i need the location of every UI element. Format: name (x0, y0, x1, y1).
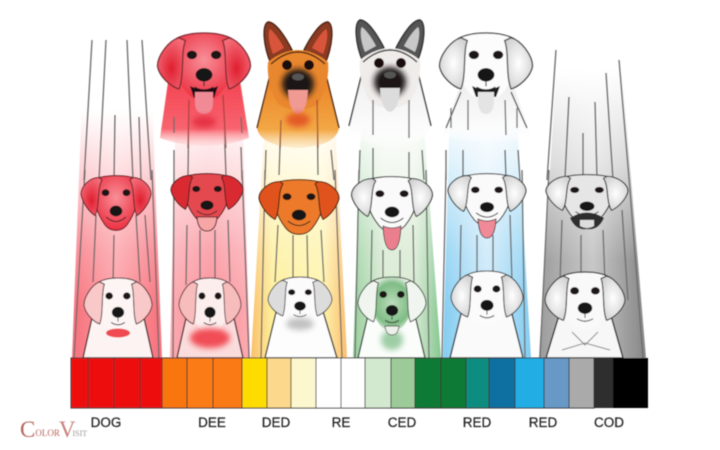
dog: orange shepherd, top row (257, 22, 339, 148)
spectrum labels: DOG (91, 415, 121, 430)
logo: ColorVisit: OLOR (35, 428, 60, 438)
dog: white golden, top row (440, 33, 532, 142)
bottom row dog: shaggy white on grey (545, 272, 625, 358)
coloured background bands (72, 70, 646, 358)
spectrum labels: COD (594, 415, 624, 430)
bottom row dog: white (265, 277, 337, 358)
logo: ColorVisit: V (59, 417, 76, 442)
spectrum labels: DEE (198, 415, 226, 430)
middle row dog: orange (259, 180, 339, 234)
spectrum labels: DED (262, 415, 290, 430)
middle row dog: white with small tongue (448, 174, 526, 238)
dog: grey shepherd, top row (349, 20, 431, 146)
bottom row dog: white with wide red chest (177, 278, 243, 358)
vertical lines behind the dogs (74, 40, 643, 358)
bottom row dog: white with green face (358, 277, 426, 358)
dog: red golden, top row (158, 33, 250, 146)
logo: ColorVisit: C (20, 417, 35, 442)
middle row dog: red (81, 176, 151, 230)
spectrum labels: RE (332, 415, 350, 430)
logo: ColorVisit: ISIT (72, 429, 87, 438)
middle row dog: white with pink tongue (352, 177, 432, 250)
bottom row dog: white on blue (450, 271, 523, 358)
middle row dog: deep red with tongue (171, 174, 243, 231)
middle row dog: grey bulldog (546, 175, 628, 229)
colour spectrum bar (71, 358, 648, 408)
logo: ColorVisit (20, 417, 87, 442)
spectrum labels: RED (529, 415, 557, 430)
spectrum labels (91, 415, 624, 430)
spectrum labels: RED (463, 415, 491, 430)
lines over the top-row dogs (174, 95, 517, 148)
bottom row dog: white with red chest (83, 278, 153, 358)
spectrum labels: CED (388, 415, 416, 430)
